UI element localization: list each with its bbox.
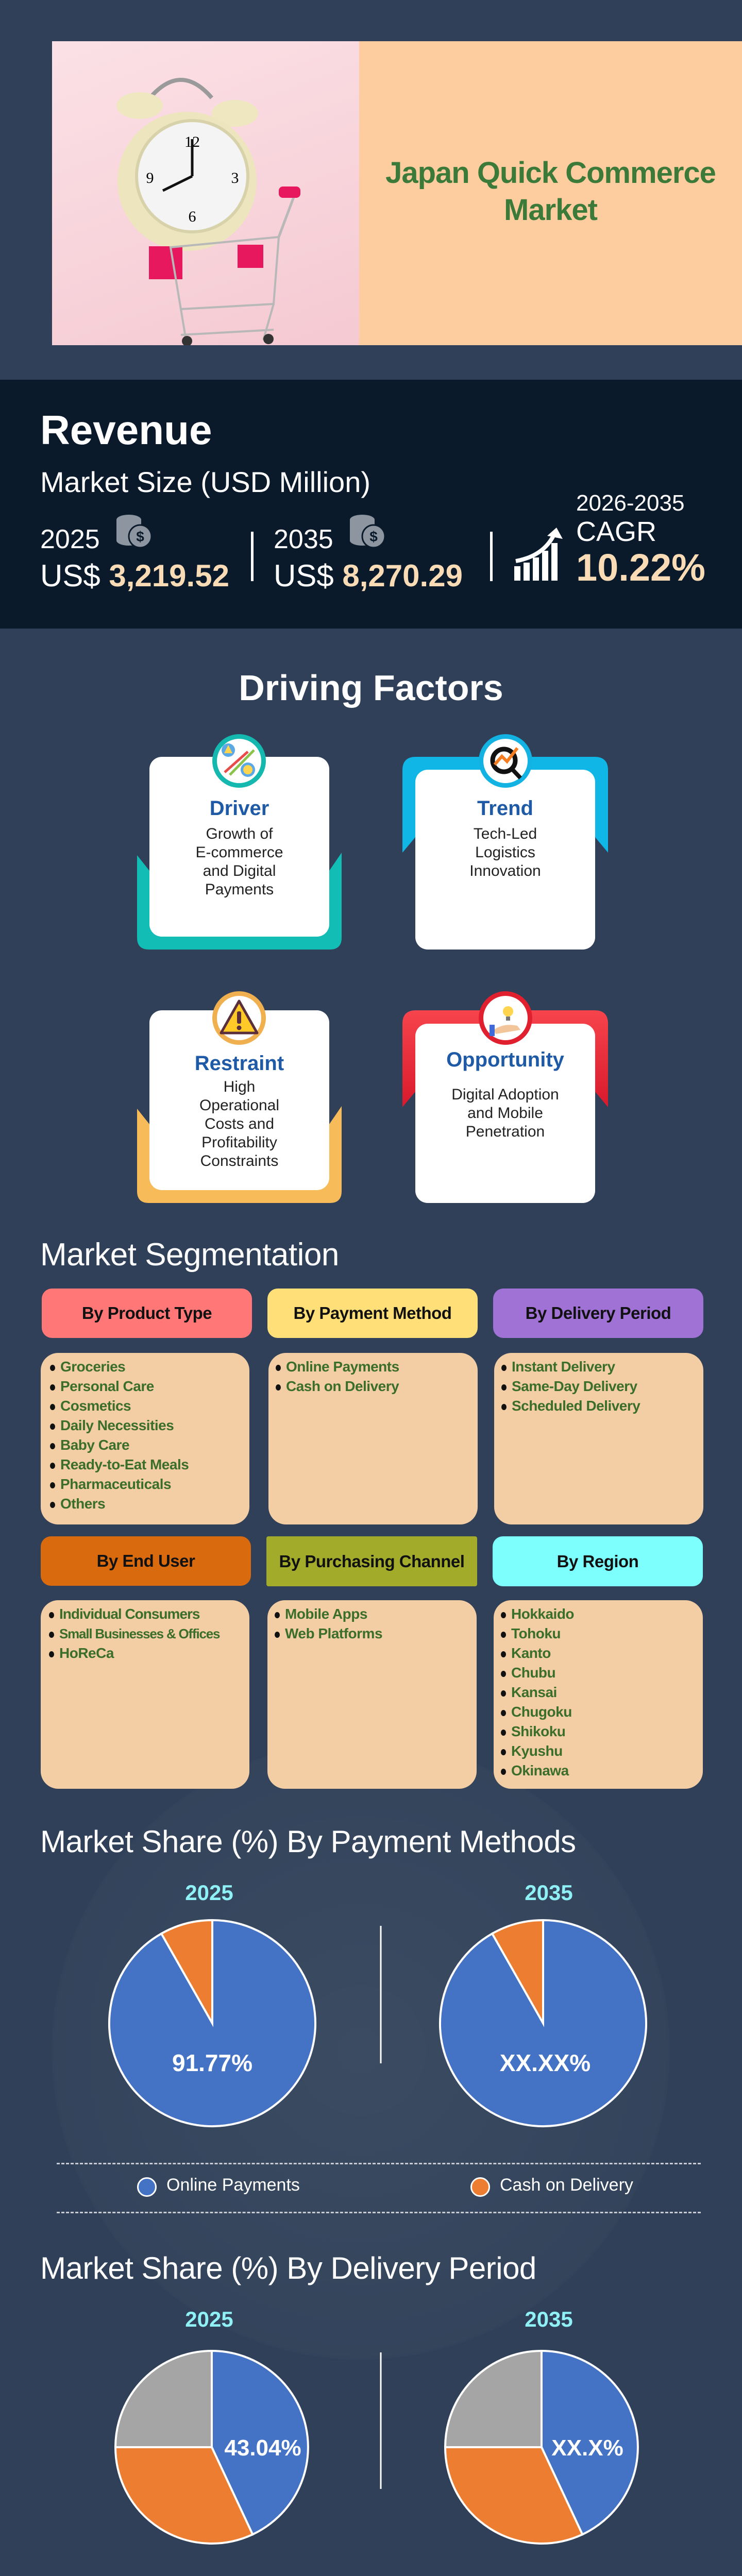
- year label 2025: 2025: [185, 2307, 233, 2331]
- panel: restraint: Profitability: [201, 1134, 277, 1151]
- panel: driver: Payments: [205, 881, 274, 898]
- pie 2025: 43.04%: [224, 2435, 301, 2461]
- segment: by product type: [41, 1289, 252, 1524]
- panel: restraint: Operational: [199, 1097, 279, 1114]
- stat 2025: 2025: [40, 524, 100, 554]
- segment: by region: Shikoku: [511, 1723, 565, 1739]
- segment: by region: By Region: [557, 1552, 638, 1570]
- segment: by end user: By End User: [97, 1551, 195, 1570]
- segment: by region: Okinawa: [511, 1762, 569, 1778]
- panel: opportunity: Opportunity: [446, 1048, 564, 1071]
- pie 2025: [115, 2351, 308, 2544]
- heading: market share by payment methods: Market Share (%) By Payment Methods: [40, 1824, 576, 1859]
- CAGR: 10.22%: [576, 546, 705, 589]
- pie 2035: [440, 1920, 646, 2126]
- title: [385, 156, 716, 227]
- stat 2035: US$ 8,270.29: [274, 558, 463, 593]
- panel: restraint: Costs and: [205, 1115, 274, 1132]
- legend: payment methods: [137, 2175, 633, 2197]
- panel: restraint: Constraints: [200, 1153, 278, 1170]
- hero image panel: [52, 41, 359, 345]
- segment: by end user: [41, 1536, 251, 1789]
- icon: warning: [212, 991, 266, 1045]
- segment: by end user: Small Businesses & Offices: [59, 1626, 220, 1641]
- stat 2025: US$ 3,219.52: [40, 558, 229, 593]
- icon: alarm clock in cart: 9: [146, 170, 154, 187]
- legend: payment methods: Online Payments: [166, 2175, 300, 2195]
- panel: trend: [402, 734, 608, 950]
- segment: by product type: Others: [60, 1496, 105, 1512]
- segment: by payment method: Cash on Delivery: [286, 1378, 399, 1394]
- segment: by product type: Pharmaceuticals: [60, 1476, 171, 1492]
- panel: driver: Growth of: [206, 825, 273, 842]
- panel: opportunity: [402, 991, 608, 1203]
- heading: driving factors: Driving Factors: [239, 668, 503, 708]
- icon: coins: $: [136, 529, 144, 545]
- CAGR: CAGR: [576, 516, 656, 547]
- segment: by purchasing channel: By Purchasing Channel: [279, 1552, 464, 1570]
- segment: by product type: Daily Necessities: [60, 1417, 174, 1433]
- segment: by region: Kansai: [511, 1684, 557, 1700]
- panel: restraint: High: [224, 1078, 255, 1095]
- icon: alarm clock in cart: 12: [184, 133, 200, 150]
- segment: by delivery period: Scheduled Delivery: [512, 1398, 640, 1414]
- icon: opportunity: [479, 991, 532, 1045]
- segment: by end user: Individual Consumers: [59, 1606, 200, 1622]
- CAGR: 2026-2035: [576, 490, 684, 516]
- icon: coins: [116, 515, 150, 547]
- panel: driver: Driver: [210, 797, 269, 820]
- stat 2035: 2035: [274, 524, 333, 554]
- segment: by delivery period: Same-Day Delivery: [512, 1378, 637, 1394]
- market size label: Market Size (USD Million): [40, 466, 370, 498]
- segment: by region: [493, 1536, 703, 1789]
- segment: by region: Chugoku: [511, 1704, 572, 1720]
- CAGR: [576, 490, 705, 589]
- pie 2035: [445, 2351, 638, 2544]
- segment: by end user: HoReCa: [59, 1645, 114, 1661]
- icon: trend: [479, 734, 532, 788]
- pie 2025: 91.77%: [172, 2049, 252, 2076]
- heading: market segmentation: Market Segmentation: [40, 1237, 339, 1273]
- title: Market: [504, 193, 597, 227]
- panel: opportunity: and Mobile: [467, 1105, 543, 1122]
- segment: by product type: Ready-to-Eat Meals: [60, 1456, 189, 1472]
- revenue heading: Revenue: [40, 407, 212, 453]
- segment: by delivery period: Instant Delivery: [512, 1359, 615, 1375]
- segment: by delivery period: [493, 1289, 703, 1524]
- icon: driver: [212, 734, 266, 788]
- icon: alarm clock in cart: [116, 80, 300, 346]
- segment: by product type: Baby Care: [60, 1437, 129, 1453]
- icon: growth chart: [514, 528, 563, 581]
- segment: by region: Hokkaido: [511, 1606, 574, 1622]
- segment: by product type: Personal Care: [60, 1378, 154, 1394]
- legend: payment methods: Cash on Delivery: [500, 2175, 633, 2195]
- segment: by region: Tohoku: [511, 1625, 561, 1641]
- segment: by purchasing channel: Web Platforms: [285, 1625, 382, 1641]
- panel: trend: Trend: [477, 797, 533, 820]
- pie 2025: [109, 1920, 315, 2126]
- panel: opportunity: Digital Adoption: [451, 1086, 559, 1103]
- panel: opportunity: Penetration: [466, 1123, 545, 1140]
- segment: by product type: Cosmetics: [60, 1398, 131, 1414]
- segment: by product type: Groceries: [60, 1359, 125, 1375]
- heading: market share by delivery period: Market Share (%) By Delivery Period: [40, 2251, 536, 2285]
- segment: by payment method: [267, 1289, 478, 1524]
- year label 2025: 2025: [185, 1880, 233, 1905]
- background faded clock: [52, 1741, 670, 2360]
- segment: by region: Kanto: [511, 1645, 551, 1661]
- panel: driver: [137, 734, 342, 950]
- pie charts: payment methods: [108, 1919, 647, 2128]
- segment: by product type: By Product Type: [82, 1303, 212, 1323]
- panel: restraint: Restraint: [195, 1052, 284, 1075]
- panel: driver: E-commerce: [195, 844, 283, 861]
- year label 2035: 2035: [525, 2307, 573, 2331]
- revenue band: [0, 380, 742, 629]
- stat 2035: [274, 515, 463, 593]
- panel: restraint: [137, 991, 342, 1203]
- icon: coins: $: [369, 529, 378, 545]
- panel: driver: and Digital: [203, 862, 276, 879]
- segment: by region: Kyushu: [511, 1743, 563, 1759]
- segment: by region: Chubu: [511, 1665, 555, 1681]
- icon: coins: [350, 515, 384, 547]
- title panel: [359, 41, 742, 345]
- segment: by purchasing channel: Mobile Apps: [285, 1606, 367, 1622]
- pie 2035: XX.XX%: [500, 2049, 591, 2076]
- panel: trend: Tech-Led: [474, 825, 537, 842]
- pie 2035: XX.X%: [551, 2435, 623, 2461]
- title: Japan Quick Commerce: [385, 156, 716, 190]
- stat 2025: [40, 515, 229, 593]
- panel: trend: Innovation: [469, 862, 541, 879]
- segment: by delivery period: By Delivery Period: [526, 1303, 671, 1323]
- segment: by purchasing channel: [266, 1536, 477, 1789]
- icon: alarm clock in cart: 6: [189, 208, 196, 225]
- segment: by payment method: Online Payments: [286, 1359, 399, 1375]
- pie charts: delivery period: [114, 2350, 639, 2545]
- icon: alarm clock in cart: 3: [231, 170, 239, 187]
- year label 2035: 2035: [525, 1880, 573, 1905]
- panel: trend: Logistics: [475, 844, 535, 861]
- segment: by payment method: By Payment Method: [294, 1303, 451, 1323]
